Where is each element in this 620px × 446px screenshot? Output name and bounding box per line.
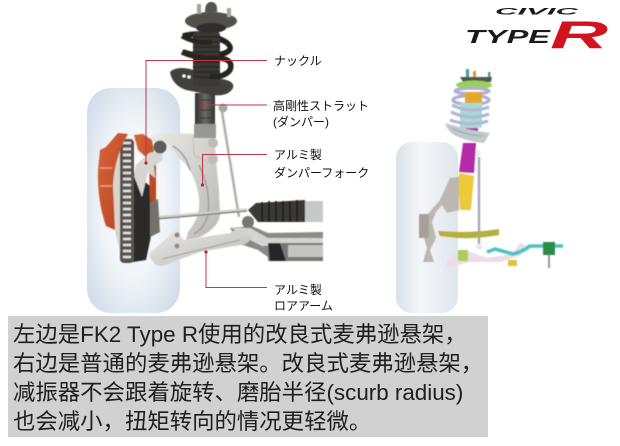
purple damper bbox=[459, 143, 476, 173]
orange front caliper bbox=[98, 133, 128, 230]
caption text: 也会减小，扭矩转向的情况更轻微。 bbox=[13, 409, 371, 434]
purple rod bbox=[465, 128, 478, 134]
logo: Civic Type R: CIVIC bbox=[495, 6, 580, 16]
ball joint upper bbox=[154, 140, 166, 154]
label: high rigidity strut: (ダンパー) bbox=[273, 114, 329, 129]
tie rod bbox=[156, 210, 247, 218]
label: aluminium damper fork: アルミ製 bbox=[274, 148, 322, 162]
orange rear caliper bbox=[134, 134, 156, 206]
spring lower seat bbox=[170, 68, 233, 95]
back coil bbox=[183, 34, 230, 56]
caption text: 减振器不会跟着旋转、磨胎半径(scurb radius) bbox=[13, 380, 463, 405]
leader dots bbox=[144, 103, 208, 254]
steering rack bbox=[305, 201, 323, 222]
top bolts bbox=[466, 69, 469, 77]
label: high rigidity strut: 高剛性ストラット bbox=[273, 98, 369, 113]
caption text: 左边是FK2 Type R使用的改良式麦弗逊悬架， bbox=[13, 322, 467, 347]
top plate bbox=[460, 77, 492, 82]
green bush bbox=[543, 242, 555, 255]
green ring bbox=[456, 80, 492, 90]
hub lower joint bbox=[150, 199, 160, 237]
fork bolts bbox=[208, 138, 218, 148]
label: aluminium lower arm: ロアアーム bbox=[274, 299, 333, 313]
front coils bbox=[450, 105, 489, 124]
knuckle right bbox=[423, 177, 459, 262]
upright knuckle bbox=[134, 150, 163, 197]
caption box bbox=[8, 316, 489, 437]
panel: right suspension diagram bbox=[396, 69, 563, 313]
rack mount bbox=[242, 216, 254, 228]
orange bump stop bbox=[465, 92, 482, 103]
strut damper bbox=[170, 2, 237, 138]
rear dark backing plate bbox=[133, 172, 151, 262]
logo: Civic Type R bbox=[465, 6, 608, 57]
stabilizer link bbox=[222, 112, 239, 217]
stabilizer link right bbox=[478, 157, 480, 244]
aluminium damper fork bbox=[152, 126, 220, 240]
label: knuckle: ナックル bbox=[274, 54, 322, 68]
back coils bbox=[453, 88, 489, 104]
lower yellow nut bbox=[508, 260, 517, 266]
top plate bbox=[185, 12, 237, 30]
label: aluminium lower arm: アルミ製 bbox=[274, 283, 322, 297]
bush rod bbox=[548, 255, 550, 268]
brown hub block bbox=[419, 214, 429, 238]
caption text: 右边是普通的麦弗逊悬架。改良式麦弗逊悬架， bbox=[13, 351, 483, 376]
front coil bbox=[182, 52, 231, 76]
logo: Civic Type R: R bbox=[550, 14, 608, 57]
teal dust boot bbox=[460, 103, 482, 128]
spring lower seat bbox=[445, 123, 490, 143]
cyan stabilizer bar bbox=[487, 246, 563, 254]
disc face bbox=[113, 140, 120, 252]
tire silhouette right bbox=[396, 142, 458, 313]
leader lines bbox=[146, 60, 267, 288]
rubber bellows bbox=[193, 32, 220, 86]
subframe bbox=[230, 226, 323, 261]
panel: left suspension diagram bbox=[87, 2, 323, 313]
tire silhouette left bbox=[87, 88, 180, 313]
lower arm right bbox=[445, 243, 527, 268]
brake disc vents bbox=[120, 139, 134, 263]
yellow fork bbox=[458, 173, 474, 210]
label: aluminium damper fork: ダンパーフォーク bbox=[274, 165, 369, 180]
olive upper link bbox=[438, 229, 499, 238]
logo: Civic Type R: TYPE bbox=[465, 27, 552, 47]
lower arm bbox=[150, 227, 252, 266]
